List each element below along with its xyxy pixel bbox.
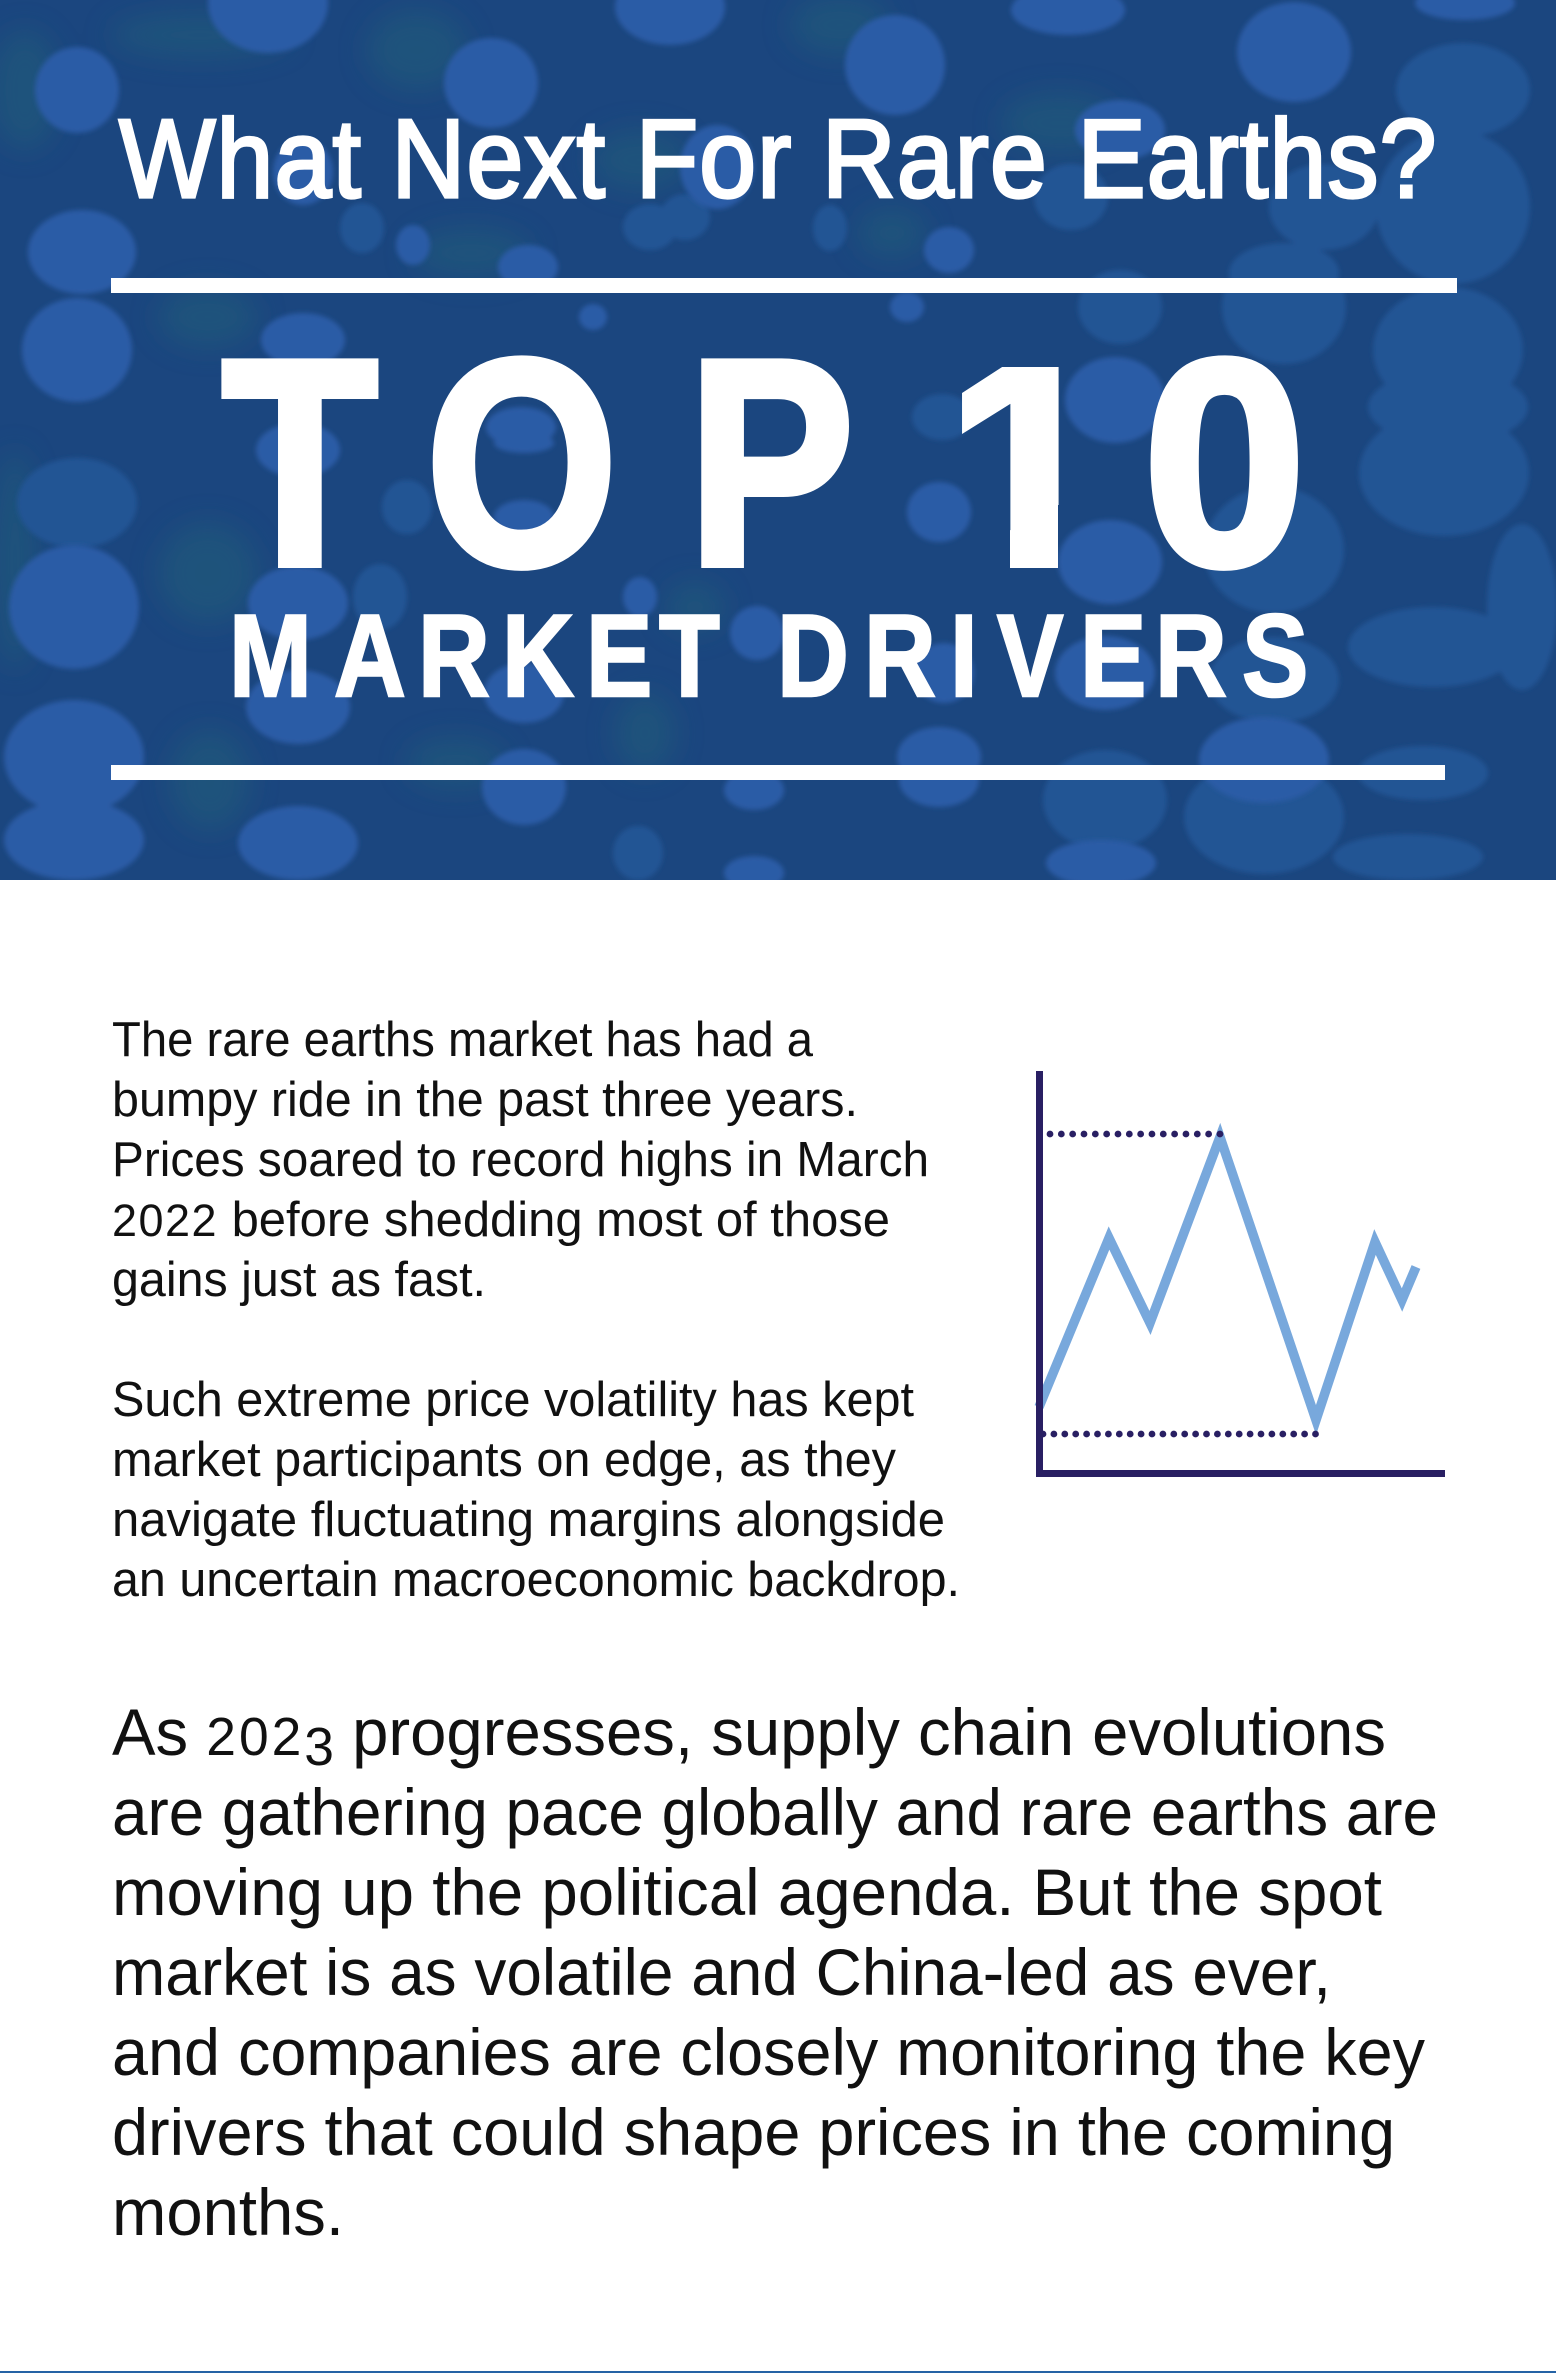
text block: main paragraph: 3 <box>304 1717 334 1777</box>
text block: intro paragraph two: Such extreme price volatility has kept <box>112 1373 914 1427</box>
text block: main paragraph: progresses, supply chain evolutions <box>334 1695 1386 1769</box>
text block: main paragraph <box>112 1695 1438 2249</box>
text block: intro paragraph one: The rare earths market has had a <box>112 1013 814 1067</box>
text block: main paragraph: market is as volatile and China-led as ever, <box>112 1935 1331 2009</box>
text block: main paragraph: and companies are closely monitoring the key <box>112 2015 1425 2089</box>
text block: intro paragraph one: 2022 before shedding most of those <box>112 1193 890 1247</box>
text block: main paragraph: are gathering pace globally and rare earths are <box>112 1775 1438 1849</box>
panel: header banner <box>0 0 1556 890</box>
text block: intro paragraph one: gains just as fast. <box>112 1253 486 1307</box>
heading: MARKET DRIVERS: MARKET DRIVERS <box>229 591 1308 722</box>
text block: intro paragraph two: navigate fluctuating margins alongside <box>112 1493 945 1547</box>
dotted high marker <box>1050 1131 1222 1137</box>
heading: TOP 10: 0 <box>1143 300 1306 627</box>
chart axes <box>1040 1071 1445 1474</box>
bottom border <box>0 2371 1556 2373</box>
price line <box>1039 1137 1416 1420</box>
text block: main paragraph: As 202 <box>112 1695 305 1769</box>
bottom rule <box>111 765 1445 780</box>
dotted low marker <box>1043 1431 1316 1437</box>
text block: intro paragraph two: market participants on edge, as they <box>112 1433 896 1487</box>
top rule <box>111 278 1457 293</box>
text block: intro paragraph one: bumpy ride in the past three years. <box>112 1073 858 1127</box>
text block: intro paragraph one <box>112 1013 929 1307</box>
heading: TOP 10 <box>221 355 1298 571</box>
title: What Next For Rare Earths? <box>119 96 1436 221</box>
text block: main paragraph: drivers that could shape prices in the coming <box>112 2095 1395 2169</box>
text block: intro paragraph two: an uncertain macroeconomic backdrop. <box>112 1553 960 1607</box>
heading: TOP 10: O <box>426 300 617 627</box>
header background with bokeh circles <box>0 0 1556 890</box>
chart: price volatility line <box>1039 1071 1445 1474</box>
heading: TOP 10: P <box>688 299 854 626</box>
text block: intro paragraph two <box>112 1373 960 1607</box>
text block: intro paragraph one: Prices soared to record highs in March <box>112 1133 929 1187</box>
text block: main paragraph: moving up the political agenda. But the spot <box>112 1855 1382 1929</box>
heading: TOP 10: T <box>222 299 378 627</box>
text block: main paragraph: months. <box>112 2175 344 2249</box>
heading: TOP 10: 1 <box>946 300 1109 627</box>
